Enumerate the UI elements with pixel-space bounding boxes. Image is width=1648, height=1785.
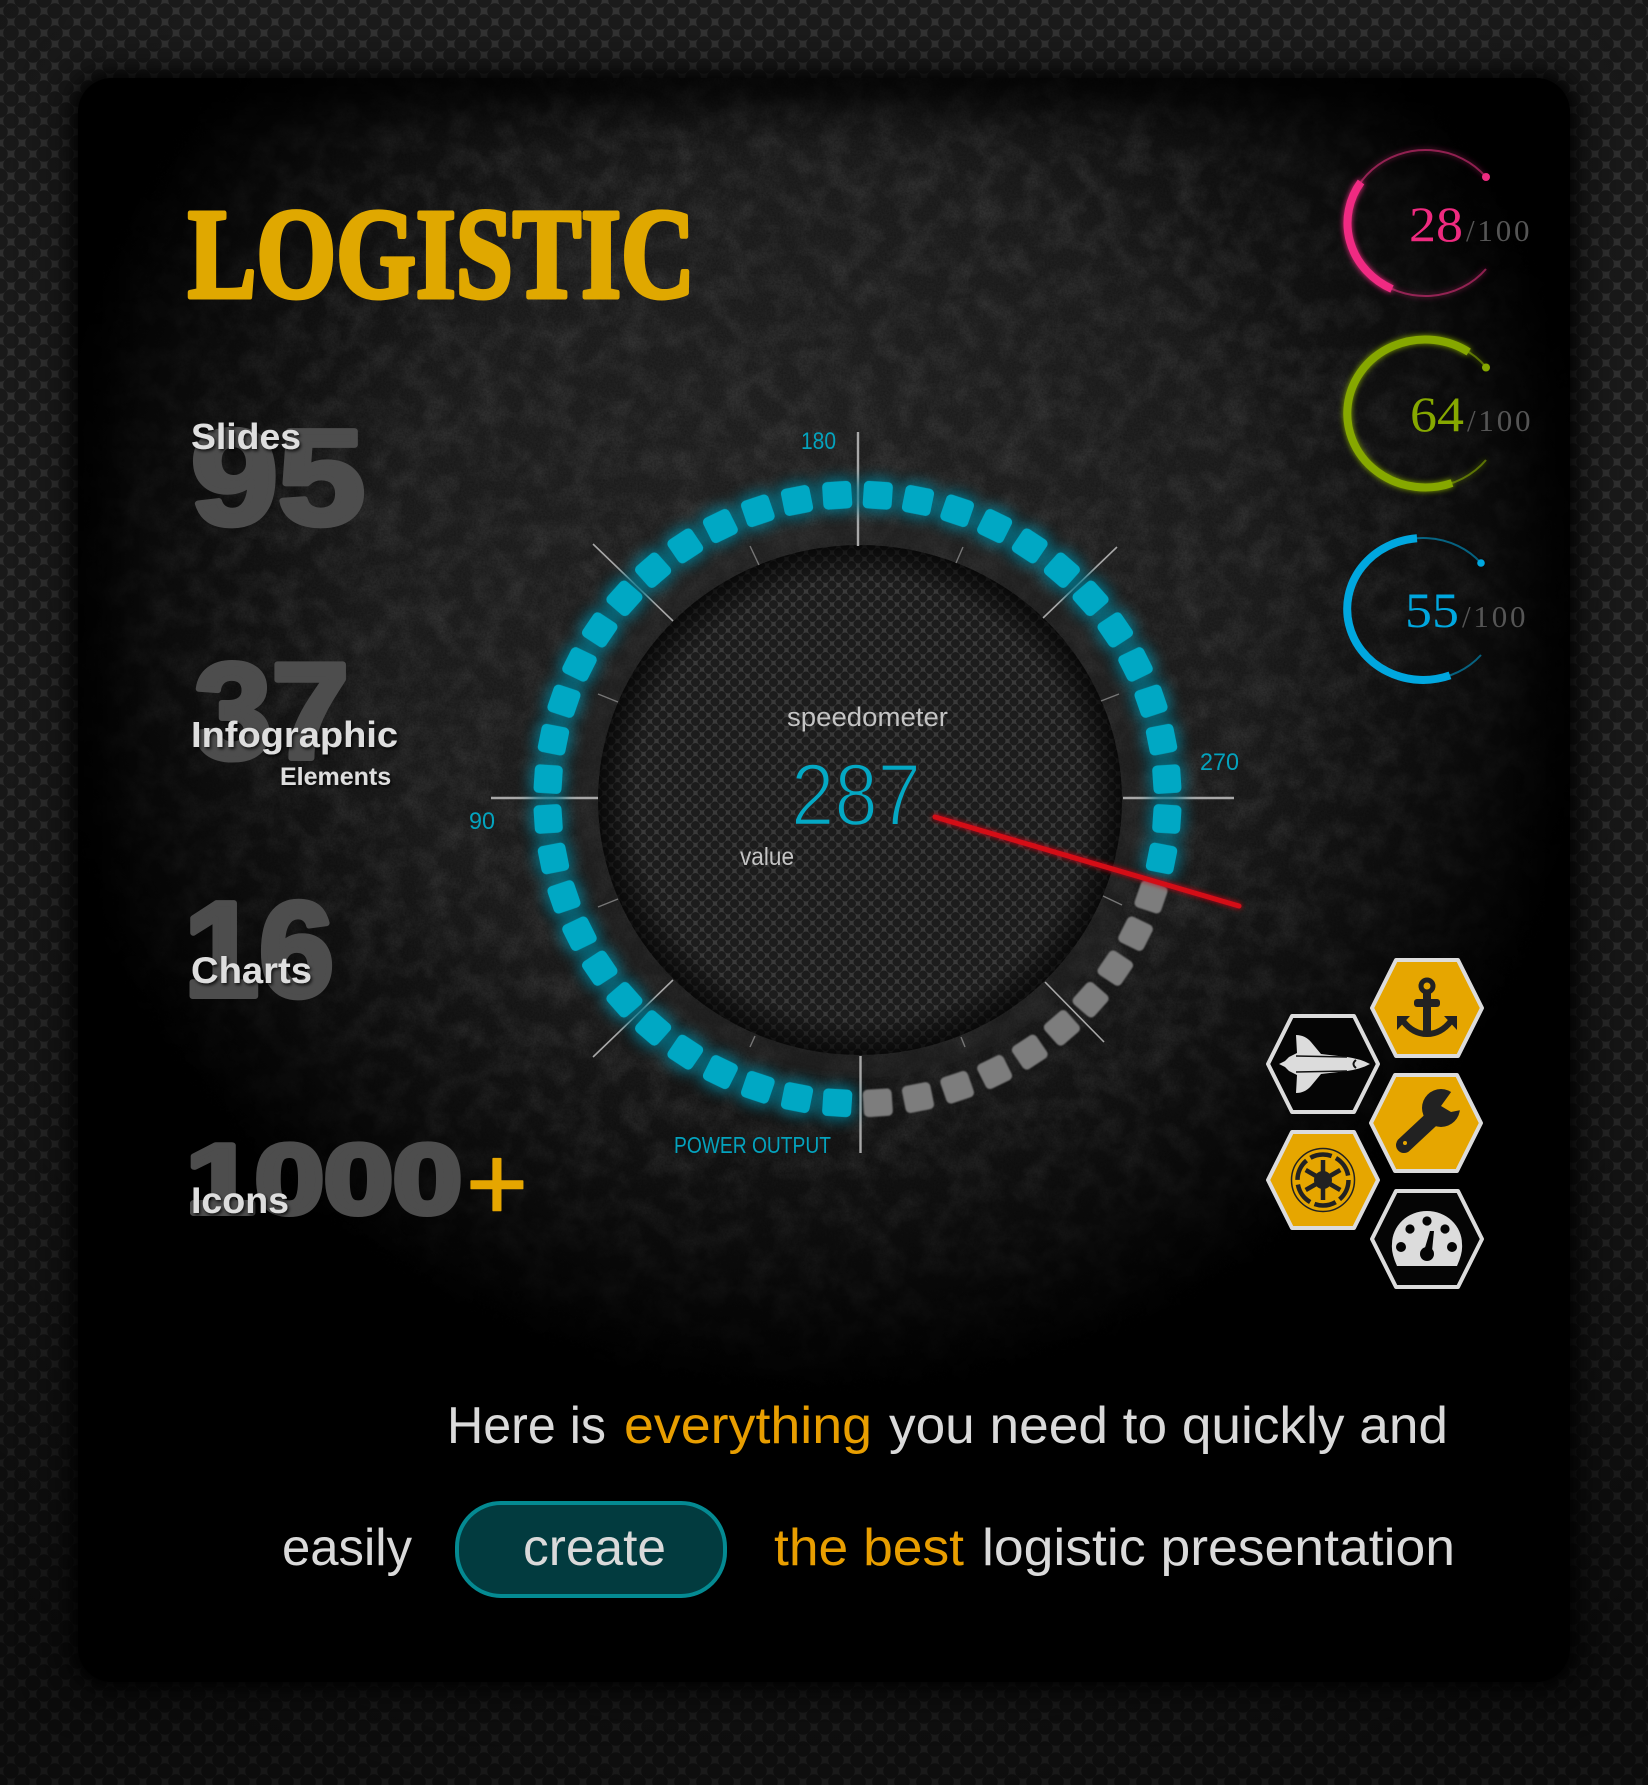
dial face: mesh <box>598 545 1122 1055</box>
gauge: 28/100: /100 <box>1466 213 1532 248</box>
scale label 270: 270 <box>1200 749 1239 776</box>
stat: 1000+ icons: + <box>466 1125 528 1243</box>
gauge: 28/100: 28 <box>1409 196 1463 252</box>
gauge: 55/100: 55 <box>1405 582 1459 638</box>
tagline line 1 <box>447 1397 1448 1455</box>
stat: 1000+ icons <box>186 1124 528 1243</box>
gauge: 55/100: /100 <box>1462 599 1528 634</box>
dial band <box>575 522 1145 1078</box>
tagline line 2: easily <box>282 1519 412 1577</box>
gauge: 55/100 <box>1347 538 1528 680</box>
stat: 37 infographic elements: 37 <box>194 635 349 787</box>
tagline line 2 <box>282 1503 1455 1596</box>
create pill <box>457 1503 725 1596</box>
unlit segments <box>862 879 1169 1117</box>
tagline line 2: logistic presentation <box>982 1519 1455 1577</box>
lit segments <box>533 481 1182 1117</box>
tagline line 1: everything <box>624 1397 872 1455</box>
stat: 16 charts: Charts <box>191 950 312 991</box>
icon: dashboard gauge hexagon <box>1372 1191 1482 1287</box>
gauge: 64/100 <box>1347 339 1533 488</box>
power output label: POWER OUTPUT <box>674 1132 831 1158</box>
scale label 90: 90 <box>469 808 495 835</box>
needle <box>935 817 1239 906</box>
tagline line 1: Here is <box>447 1397 606 1455</box>
stat: 95 slides: Slides <box>191 416 301 457</box>
stat: 16 charts: 16 <box>184 874 334 1025</box>
create pill: create <box>523 1519 666 1577</box>
title: LOGISTIC <box>188 183 695 325</box>
tagline line 1: you need to quickly and <box>889 1397 1448 1455</box>
icon: wrench hexagon <box>1371 1075 1481 1171</box>
stat: 37 infographic elements: Infographic <box>191 714 398 755</box>
stat: 95 slides: 95 <box>191 402 365 553</box>
stat: 1000+ icons: Icons <box>191 1180 289 1221</box>
gauge: 28/100 <box>1347 150 1532 296</box>
speedometer label: speedometer <box>787 702 948 732</box>
value label: value <box>740 843 794 871</box>
icon: anchor hexagon <box>1372 960 1482 1056</box>
tagline line 2: the best <box>774 1519 965 1577</box>
speedometer value: 287 <box>791 745 921 844</box>
gauge: 64/100: /100 <box>1467 403 1533 438</box>
speedometer <box>469 428 1239 1158</box>
icon: emblem hexagon <box>1268 1132 1378 1228</box>
icon: space shuttle hexagon <box>1268 1016 1378 1112</box>
stat: 1000+ icons: 1000 <box>186 1124 462 1234</box>
tick marks <box>491 432 1234 1153</box>
stat: 37 infographic elements: Elements <box>280 763 391 791</box>
gauge: 64/100: 64 <box>1410 386 1464 442</box>
scale label 180: 180 <box>801 428 836 455</box>
